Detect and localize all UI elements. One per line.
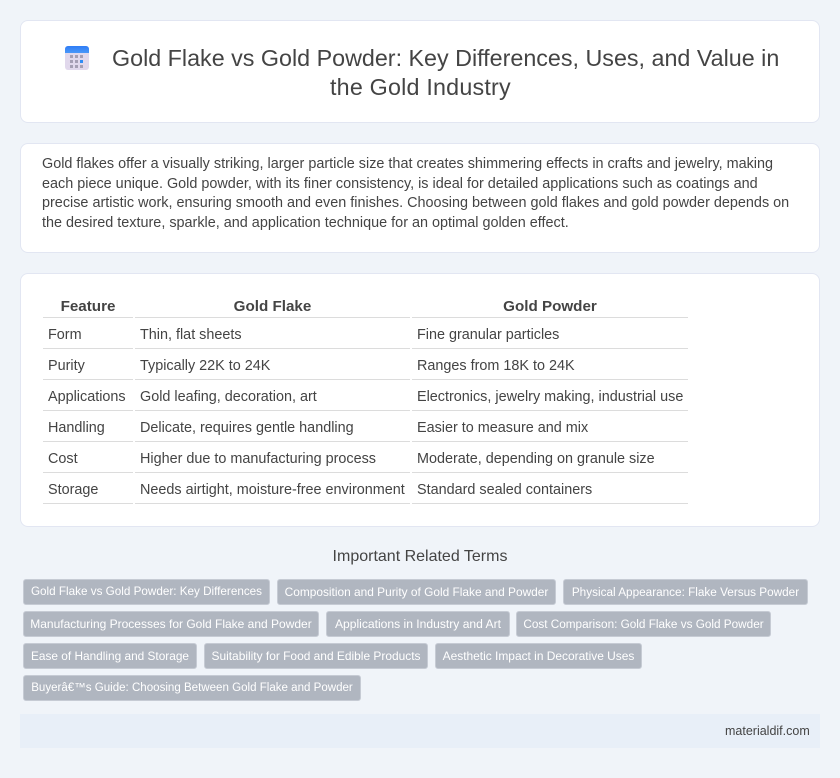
tags: related terms: [23, 579, 808, 701]
comparison table: Fine granular particles: [417, 327, 559, 343]
intro text: the desired texture, sparkle, and application technique for an optimal golden effect.: [42, 215, 569, 231]
comparison table: Easier to measure and mix: [417, 420, 588, 436]
tags: related terms: Composition and Purity of Gold Flake and Powder: [285, 585, 548, 599]
tags: related terms: Buyerâ€™s Guide: Choosing Between Gold Flake and Powder: [31, 682, 353, 694]
tags: related terms: Cost Comparison: Gold Flake vs Gold Powder: [523, 618, 764, 631]
comparison table: Purity: [48, 358, 85, 374]
title: Gold Flake vs Gold Powder: Key Differences, Uses, and Value in: [112, 45, 779, 71]
title: [112, 45, 779, 100]
tags: related terms: Aesthetic Impact in Decorative Uses: [443, 649, 634, 663]
comparison table: Higher due to manufacturing process: [140, 451, 376, 467]
comparison table: Gold leafing, decoration, art: [140, 389, 317, 405]
title: the Gold Industry: [330, 74, 511, 100]
tags: related terms: Suitability for Food and Edible Products: [211, 649, 421, 663]
intro text: precise artistic work, ensuring smooth and even finishes. Choosing between gold flakes and gold powder depends on: [42, 195, 789, 211]
comparison table: Handling: [48, 420, 105, 436]
intro text: each piece unique. Gold powder, with its finer consistency, is ideal for detailed applications such as coatings and: [42, 176, 758, 192]
comparison table: Gold Flake: [234, 298, 311, 315]
comparison table: Feature: [61, 298, 115, 315]
tags: related terms: Manufacturing Processes for Gold Flake and Powder: [30, 617, 312, 631]
tags: related terms: Physical Appearance: Flake Versus Powder: [572, 586, 799, 599]
comparison table: Standard sealed containers: [417, 482, 592, 498]
comparison table: Form: [48, 327, 82, 343]
comparison table: Thin, flat sheets: [140, 327, 242, 343]
tags: related terms: Ease of Handling and Storage: [31, 649, 189, 663]
header panel: [20, 20, 820, 123]
comparison table: Gold Powder: [503, 298, 597, 315]
comparison table: Ranges from 18K to 24K: [417, 358, 575, 374]
comparison table: Needs airtight, moisture-free environment: [140, 482, 405, 498]
intro text: [42, 156, 789, 231]
comparison table: Moderate, depending on granule size: [417, 451, 655, 467]
table panel: [20, 273, 820, 527]
comparison table: Applications: [48, 389, 126, 405]
comparison table: Storage: [48, 482, 98, 498]
comparison table: Electronics, jewelry making, industrial use: [417, 389, 683, 405]
comparison table: Delicate, requires gentle handling: [140, 420, 354, 436]
intro text: Gold flakes offer a visually striking, larger particle size that creates shimmering effects in crafts and jewelry, making: [42, 156, 773, 172]
comparison table: Cost: [48, 451, 78, 467]
tags: related terms: Applications in Industry and Art: [335, 617, 501, 631]
intro panel: [20, 143, 820, 253]
comparison table: [43, 298, 688, 504]
footer source text: materialdif.com: [725, 724, 810, 738]
comparison table: Typically 22K to 24K: [140, 358, 270, 374]
footer bar: [20, 714, 820, 748]
icon: calendar: [65, 46, 89, 70]
tags: related terms: Gold Flake vs Gold Powder: Key Differences: [31, 585, 262, 598]
related terms heading: Important Related Terms: [333, 548, 507, 565]
